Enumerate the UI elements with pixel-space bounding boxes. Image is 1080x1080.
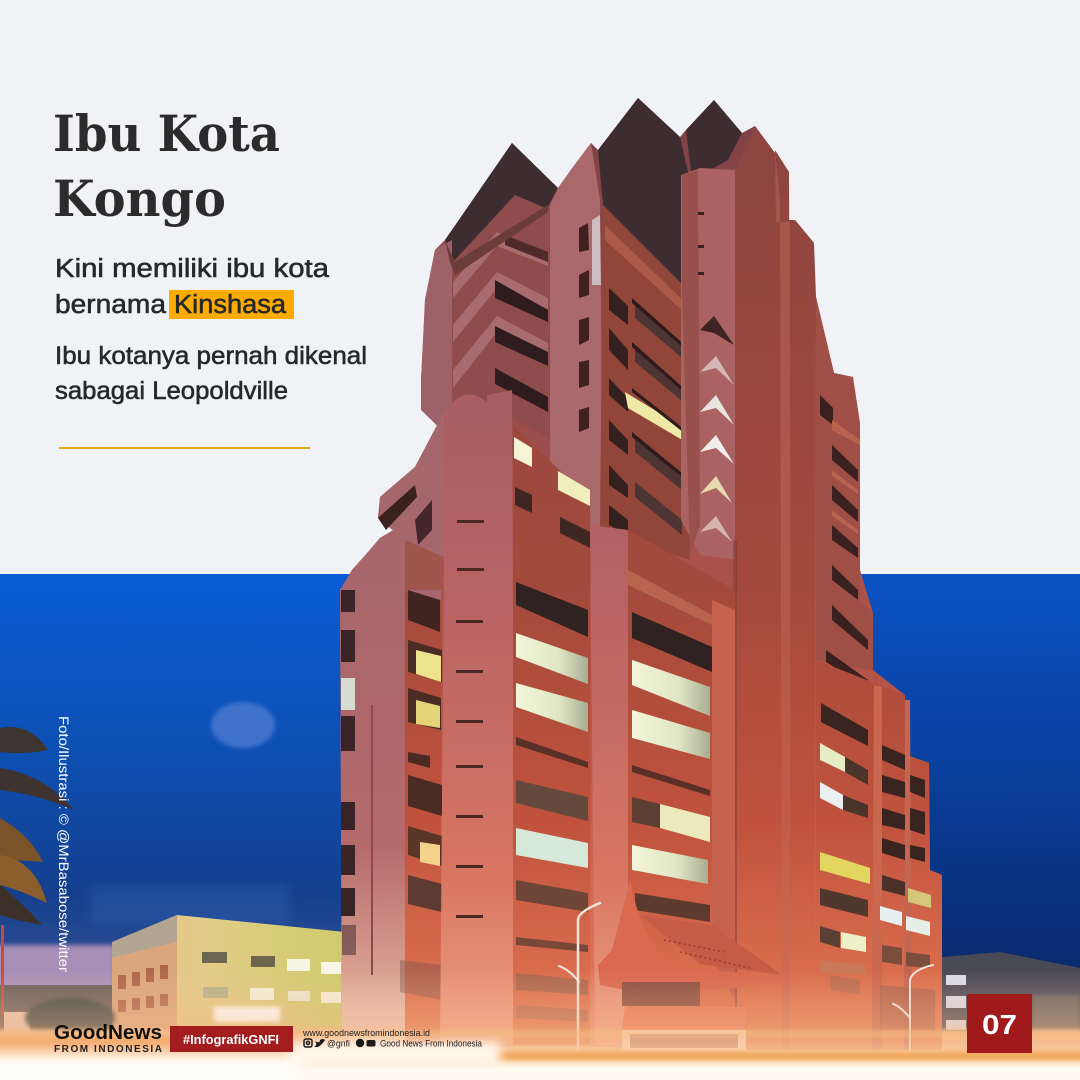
icon: instagram xyxy=(304,1039,312,1047)
logo: GoodNews from Indonesia: GoodNews xyxy=(54,1022,162,1044)
road base glow xyxy=(0,1030,1080,1080)
background top panel xyxy=(0,0,1080,574)
text block: former name xyxy=(55,342,367,405)
lower block: curved dome column xyxy=(378,394,492,1045)
lower block: left face with windows xyxy=(513,425,590,1045)
lower block: right face with windows xyxy=(628,530,735,1045)
page number xyxy=(967,994,1032,1053)
entrance lower storeys xyxy=(830,975,935,1030)
central section with window bands xyxy=(600,205,690,560)
text block: former name: Ibu kotanya pernah dikenal xyxy=(55,342,367,370)
lower left street scenery xyxy=(1,925,115,1038)
building: Kinshasa tower xyxy=(340,98,942,1050)
right wing balconies xyxy=(816,297,873,688)
icon: twitter xyxy=(314,1039,325,1047)
main tall pillar xyxy=(733,126,816,1050)
social media info: Good News From Indonesia xyxy=(380,1038,482,1048)
tower silhouette xyxy=(340,98,942,1050)
icon: facebook xyxy=(356,1039,364,1047)
title xyxy=(53,104,280,228)
icon: youtube xyxy=(366,1040,376,1046)
blue night sky photo panel xyxy=(0,574,1080,1080)
right wing lower section xyxy=(816,660,942,1050)
social media info: www.goodnewsfromindonesia.id xyxy=(302,1028,430,1039)
street lamps xyxy=(559,903,933,1060)
lower block: central pillar xyxy=(590,525,630,1045)
social media info: @gnfi xyxy=(327,1038,350,1048)
photo credit: Foto/Ilustrasi : © @MrBasabose/twitter xyxy=(56,716,71,973)
lower block: pillar xyxy=(487,390,515,1045)
social media info xyxy=(302,1028,482,1048)
right wing windows xyxy=(820,703,931,975)
divider line xyxy=(59,447,310,449)
curved column with arched openings xyxy=(681,168,738,560)
light trails and bottom glow xyxy=(0,970,1080,1080)
right distant building xyxy=(942,952,1080,1045)
entrance canopy xyxy=(598,880,800,1050)
highlight: Kinshasa: Kinshasa xyxy=(174,291,287,319)
page number: 07 xyxy=(982,1009,1017,1040)
logo: GoodNews from Indonesia: FROM INDONESIA xyxy=(54,1044,162,1055)
text block: former name: sabagai Leopoldville xyxy=(55,377,288,405)
text block: capital name xyxy=(55,255,330,319)
lower block: left wing xyxy=(340,523,442,1045)
dark roof peaks xyxy=(445,98,742,290)
title: Kongo xyxy=(53,169,226,228)
title: Ibu Kota xyxy=(53,104,280,163)
text block: capital name: Kini memiliki ibu kota xyxy=(55,255,330,283)
mauve pillar xyxy=(550,143,603,560)
pillar slot windows xyxy=(579,215,601,432)
upper left wing with balconies xyxy=(421,195,550,440)
logo: GoodNews from Indonesia xyxy=(54,1022,162,1055)
palm tree xyxy=(0,727,74,925)
left yellow building xyxy=(112,915,345,1040)
text block: capital name: bernama xyxy=(55,291,167,319)
hashtag badge: #InfografikGNFI xyxy=(183,1032,279,1047)
left wing windows xyxy=(400,590,442,1000)
hashtag badge xyxy=(170,1026,293,1052)
